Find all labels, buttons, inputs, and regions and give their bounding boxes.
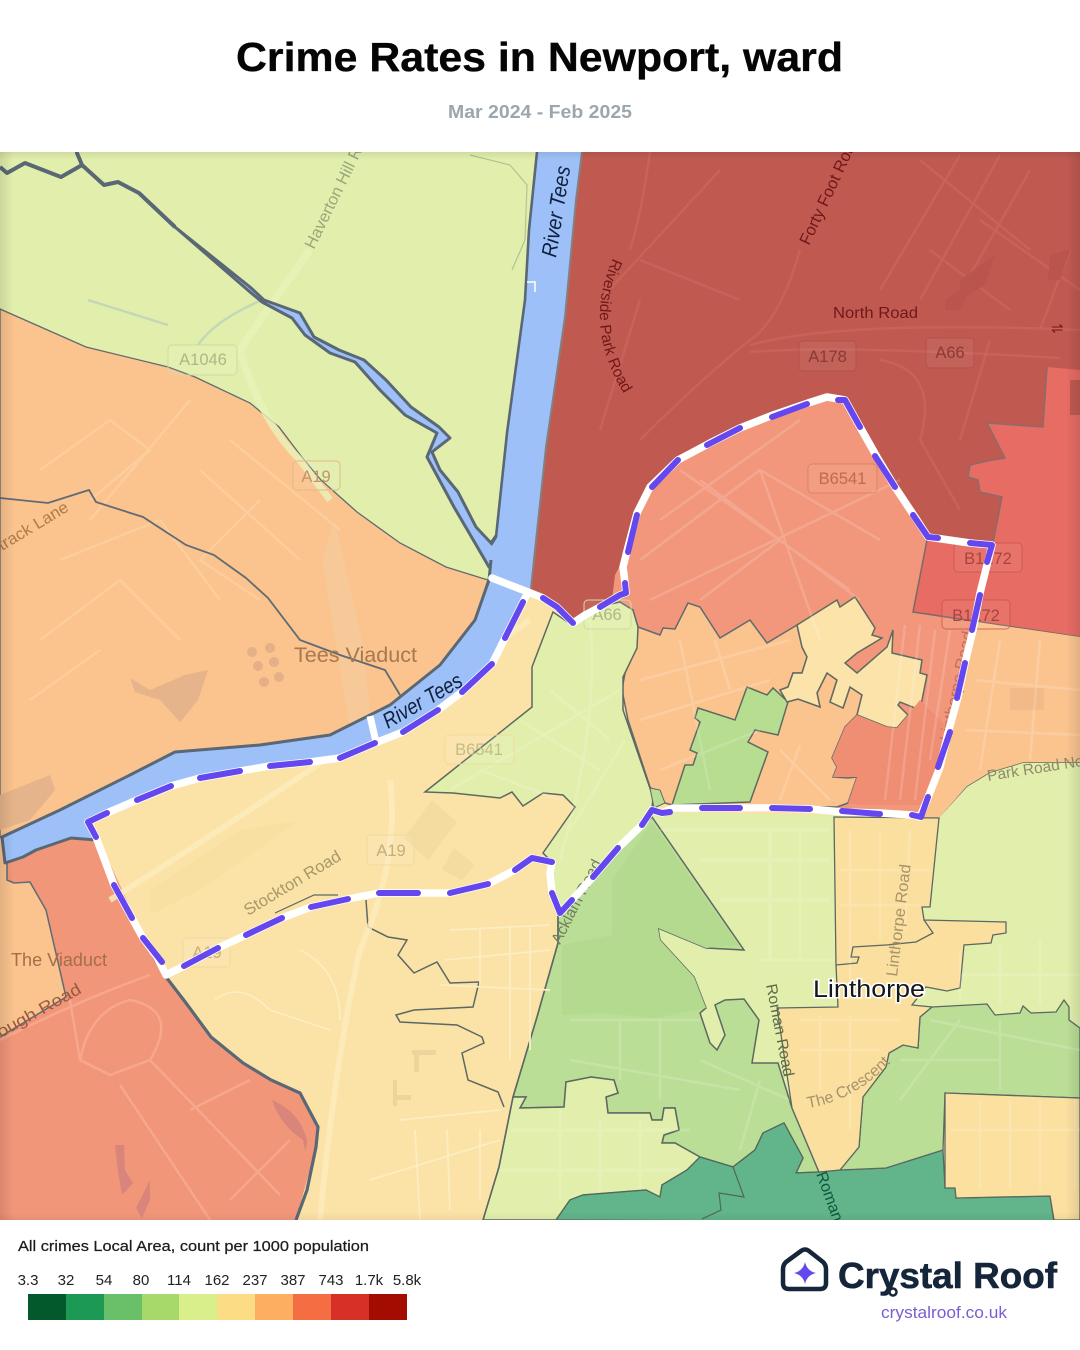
detail: east orange block <box>1010 688 1044 710</box>
legend scale labels: 32 <box>58 1272 74 1289</box>
icon: house outline <box>783 1250 826 1289</box>
shield: B1272 upper: B1272 <box>964 550 1012 568</box>
logo y-tail ring <box>890 1288 896 1296</box>
boundary: east red outlines <box>968 367 1047 543</box>
area: south-west light green <box>483 1077 700 1220</box>
shield: B6541 ward: B6541 <box>819 470 866 488</box>
detail: west orange texture <box>0 400 372 830</box>
label: Tees Viaduct: Tees Viaduct <box>294 643 417 667</box>
area: east mid green <box>840 1000 1080 1170</box>
label: River Tees south: River Tees <box>378 668 467 733</box>
label: The Crescent: The Crescent <box>806 1056 890 1108</box>
detail: north-west faint roads <box>240 250 330 500</box>
area: east bright red <box>913 367 1080 637</box>
area: central mid green <box>513 817 819 1173</box>
area: Linthorpe pale <box>777 817 1006 1172</box>
boundary: red to salmon lines <box>913 540 1080 637</box>
title: Crime Rates in Newport, ward <box>236 34 843 80</box>
label: Haverton Hill Road: Haverton Hill Road <box>301 119 378 252</box>
detail: salmon roads <box>0 975 290 1220</box>
legend colour bar <box>28 1294 407 1320</box>
boundary: dark green interior line <box>702 1167 744 1219</box>
legend scale labels: 162 <box>204 1272 230 1289</box>
area: west orange <box>0 309 488 838</box>
area: central light green <box>425 602 653 913</box>
marker: white river bar <box>370 716 376 742</box>
river: tributary creek <box>175 227 498 570</box>
map edge shading <box>0 152 1080 1220</box>
legend scale labels <box>18 1272 422 1289</box>
logo wordmark: Crystal Roof <box>838 1255 1058 1296</box>
area: ward west orange <box>622 603 862 807</box>
shield: A19 north <box>293 461 340 490</box>
shield: B6541 ward <box>808 464 877 493</box>
icon: rail station: ⇌ <box>1051 320 1064 337</box>
area: west orange strip south of river <box>0 838 66 1037</box>
shield: B1272 upper <box>954 543 1022 572</box>
boundary: east orange park line <box>940 763 1080 818</box>
label: Linthorpe Road in ward: Linthorpe Road <box>937 630 977 743</box>
shield: A178 <box>799 341 856 371</box>
label: The Viaduct: The Viaduct <box>11 950 107 970</box>
subtitle: date range: Mar 2024 - Feb 2025 <box>448 101 632 122</box>
shield: A19 south <box>183 938 230 967</box>
shield: A178: A178 <box>808 348 847 366</box>
area: south-east pale block <box>945 1093 1080 1220</box>
boundary: Linthorpe inner line <box>836 920 933 965</box>
label: River Tees north: River Tees <box>537 164 575 259</box>
legend scale labels: 54 <box>96 1272 112 1289</box>
label: Roman Road: Roman Road <box>762 983 797 1078</box>
legend scale labels: 237 <box>242 1272 268 1289</box>
shield: A1046 <box>168 345 237 375</box>
boundary: west edge of green zone <box>483 913 558 1220</box>
area: south-east light green <box>650 763 1080 1108</box>
legend scale labels: 387 <box>280 1272 306 1289</box>
ward boundary: purple dashes <box>88 400 992 966</box>
legend scale labels: 1.7k <box>355 1272 384 1289</box>
area: south-west salmon <box>0 838 318 1220</box>
shield: B1272 lower <box>942 600 1010 629</box>
label: Linthorpe: Linthorpe <box>813 976 925 1003</box>
shield: A19 centre: A19 <box>376 842 406 860</box>
label: Stockton Road: Stockton Road <box>241 847 344 919</box>
marker: white bracket <box>527 282 535 292</box>
label: North Road: North Road <box>833 305 918 322</box>
area: east orange <box>920 622 1080 818</box>
area: north-west light green <box>0 152 540 600</box>
detail: dark red railway blocks <box>945 250 1070 310</box>
label: Linthorpe Road south: Linthorpe Road <box>884 863 915 977</box>
legend scale labels: 3.3 <box>18 1272 38 1289</box>
shield: A66 centre <box>584 600 631 629</box>
label: Forty Foot Road: Forty Foot Road <box>796 132 863 248</box>
shield: B6541 centre: B6541 <box>455 741 503 759</box>
icon: purple star <box>794 1262 816 1284</box>
area: ward pale patch <box>780 597 927 728</box>
legend scale labels: 5.8k <box>393 1272 422 1289</box>
label: Riverside Park Road: Riverside Park Road <box>600 259 633 393</box>
area: north-east dark red <box>530 152 1080 640</box>
legend <box>18 1238 422 1320</box>
detail: pale area roads and buildings <box>110 620 550 1220</box>
label: Roman Road south: Roman Road <box>812 1170 860 1264</box>
boundary: south-west pale inner line <box>366 900 504 1107</box>
boundary: west orange interior line <box>0 490 400 695</box>
shield: A1046: A1046 <box>179 351 227 369</box>
river bank: Tees south-west meander <box>150 950 318 1220</box>
shield: B6541 centre <box>445 735 514 764</box>
detail: dark red street lines <box>600 152 1080 510</box>
river: creek upper thick line <box>0 153 175 227</box>
area: small green sliver at junction <box>650 788 665 808</box>
river bank: western outline <box>2 560 491 863</box>
area: ward salmon <box>612 397 977 812</box>
legend title: All crimes Local Area, count per 1000 population <box>18 1238 369 1255</box>
area: pale south-west base <box>93 588 944 1220</box>
river: main channel <box>2 152 582 863</box>
legend scale labels: 80 <box>133 1272 149 1289</box>
shield: A66 centre: A66 <box>592 606 622 624</box>
detail: north-west stream <box>88 300 262 345</box>
shield: A19 centre <box>367 835 414 865</box>
label: Acklam Road: Acklam Road <box>548 857 605 947</box>
shield: A19 south: A19 <box>192 944 222 962</box>
shield: A19 north: A19 <box>301 468 331 486</box>
river bank: north outline <box>491 152 537 545</box>
boundary: south-west outlines <box>0 863 66 1037</box>
shield: B1272 lower: B1272 <box>952 607 1000 625</box>
detail: street grid lines <box>450 420 1080 1200</box>
logo: Crystal Roof <box>783 1250 1058 1322</box>
legend scale labels: 743 <box>318 1272 344 1289</box>
detail: darker green block <box>657 926 711 1008</box>
area: ward darker salmon block <box>832 700 950 805</box>
boundary: Stockton Road line <box>275 895 338 913</box>
detail: north-west faint path <box>470 155 527 270</box>
website url: crystalroof.co.uk <box>881 1304 1008 1322</box>
area: ward green patch <box>672 687 788 805</box>
area: south dark green <box>556 1123 1054 1222</box>
shield: A66 north <box>926 338 974 368</box>
ward boundary: white route <box>88 397 992 975</box>
river bank: dark red side <box>531 152 582 588</box>
legend scale labels: 114 <box>167 1272 191 1289</box>
shield: A66 north: A66 <box>935 344 965 362</box>
detail: salmon pond patches <box>115 1100 307 1218</box>
